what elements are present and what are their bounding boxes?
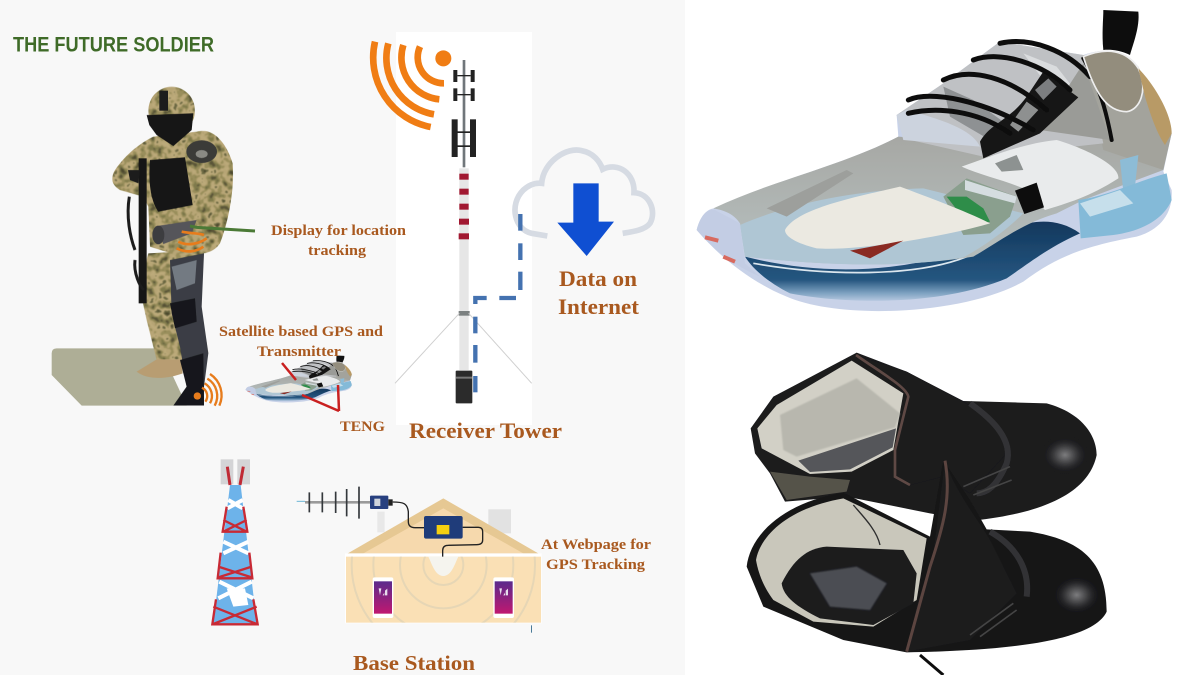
illustration: receiver tower bbox=[395, 60, 532, 403]
text: GPS transmitter label: Transmitter bbox=[257, 344, 341, 360]
illustration: base station lattice tower bbox=[212, 459, 258, 624]
arrow: TENG pointers bbox=[302, 385, 339, 411]
photo: pair of black military boots bbox=[747, 353, 1107, 675]
photo: transparent smart shoe cutaway bbox=[697, 10, 1172, 311]
text: webpage label: At Webpage for bbox=[541, 537, 651, 553]
text: GPS transmitter label bbox=[219, 324, 384, 360]
title: THE FUTURE SOLDIER bbox=[13, 34, 214, 56]
icon: cloud with download arrow bbox=[515, 150, 653, 256]
arrow: GPS pointer bbox=[282, 363, 296, 380]
text: display label: Display for location bbox=[271, 223, 407, 239]
text: GPS transmitter label: Satellite based GPS and bbox=[219, 324, 384, 340]
icon: orange signal waves bbox=[373, 42, 451, 127]
icon: phone left bbox=[373, 577, 393, 618]
icon: foot signal waves bbox=[194, 374, 222, 406]
panel: left system diagram background bbox=[0, 0, 685, 675]
icon: yagi antenna bbox=[297, 487, 370, 519]
text: TENG label: TENG bbox=[340, 419, 385, 435]
text: data on internet label bbox=[558, 266, 640, 319]
text: webpage label: GPS Tracking bbox=[546, 557, 646, 573]
text: display label bbox=[271, 223, 407, 259]
illustration: soldier on ground bbox=[52, 87, 255, 406]
panel: right photographs background bbox=[685, 0, 1200, 675]
boot: upper bbox=[751, 353, 1097, 521]
text: base station label: Base Station bbox=[353, 651, 475, 675]
icon: ceiling antenna bbox=[428, 557, 458, 576]
text: data on internet label: Data on bbox=[559, 266, 637, 291]
illustration: house with signal booster bbox=[296, 486, 541, 633]
arrow: display pointer bbox=[190, 226, 255, 231]
connector: dashed data link bbox=[475, 214, 520, 392]
text: display label: tracking bbox=[308, 243, 367, 259]
icon: signal booster bbox=[424, 516, 463, 539]
icon: hip signal waves bbox=[177, 232, 207, 251]
text: receiver tower label: Receiver Tower bbox=[409, 418, 562, 443]
boot: lower bbox=[747, 460, 1107, 675]
text: webpage label bbox=[541, 537, 651, 573]
icon: phone right bbox=[493, 577, 514, 618]
text: data on internet label: Internet bbox=[558, 294, 640, 319]
illustration: mini shoe with arrows bbox=[245, 356, 352, 411]
panel: receiver tower column bbox=[396, 32, 532, 425]
